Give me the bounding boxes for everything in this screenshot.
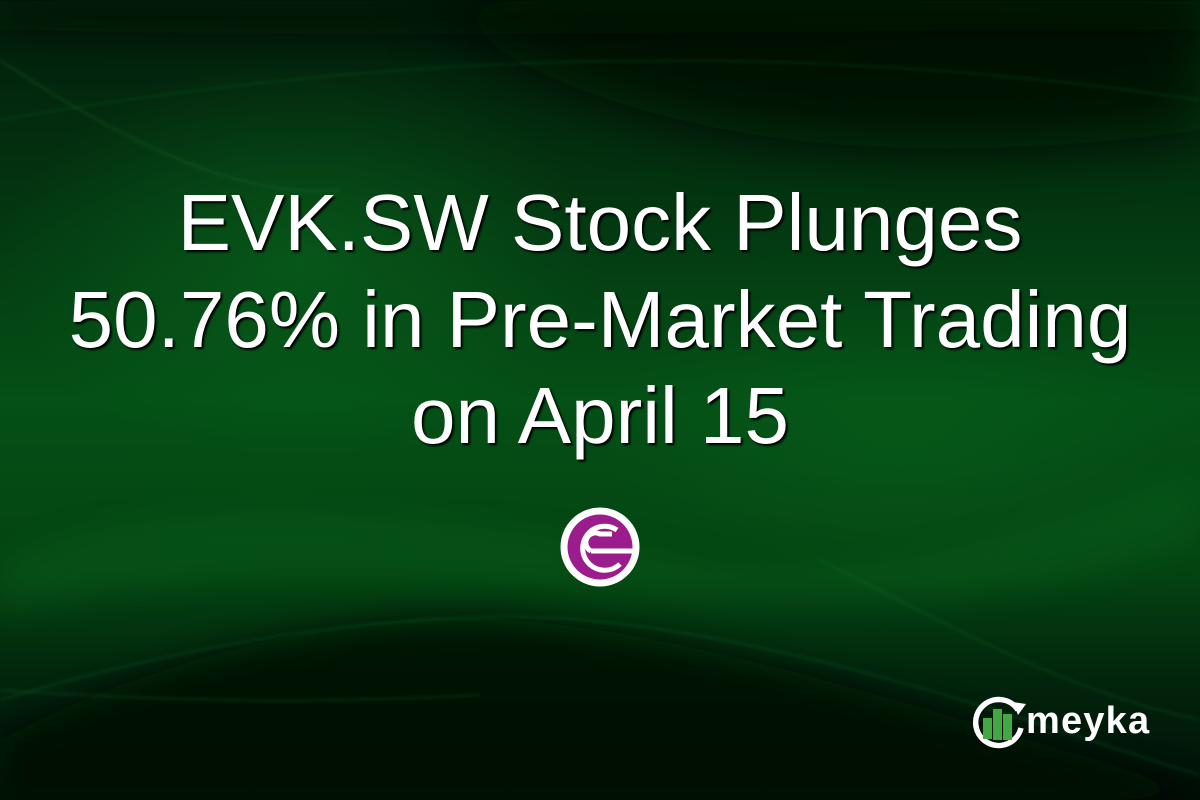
icon: company logo xyxy=(560,508,640,586)
title: 50.76% in Pre-Market Trading xyxy=(69,275,1131,364)
wordmark: meyka xyxy=(1026,700,1150,742)
logo: meyka xyxy=(972,696,1150,748)
title: EVK.SW Stock Plunges xyxy=(178,178,1022,267)
title xyxy=(69,178,1131,463)
title: on April 15 xyxy=(411,371,789,460)
icon: meyka chart ring xyxy=(972,696,1026,748)
